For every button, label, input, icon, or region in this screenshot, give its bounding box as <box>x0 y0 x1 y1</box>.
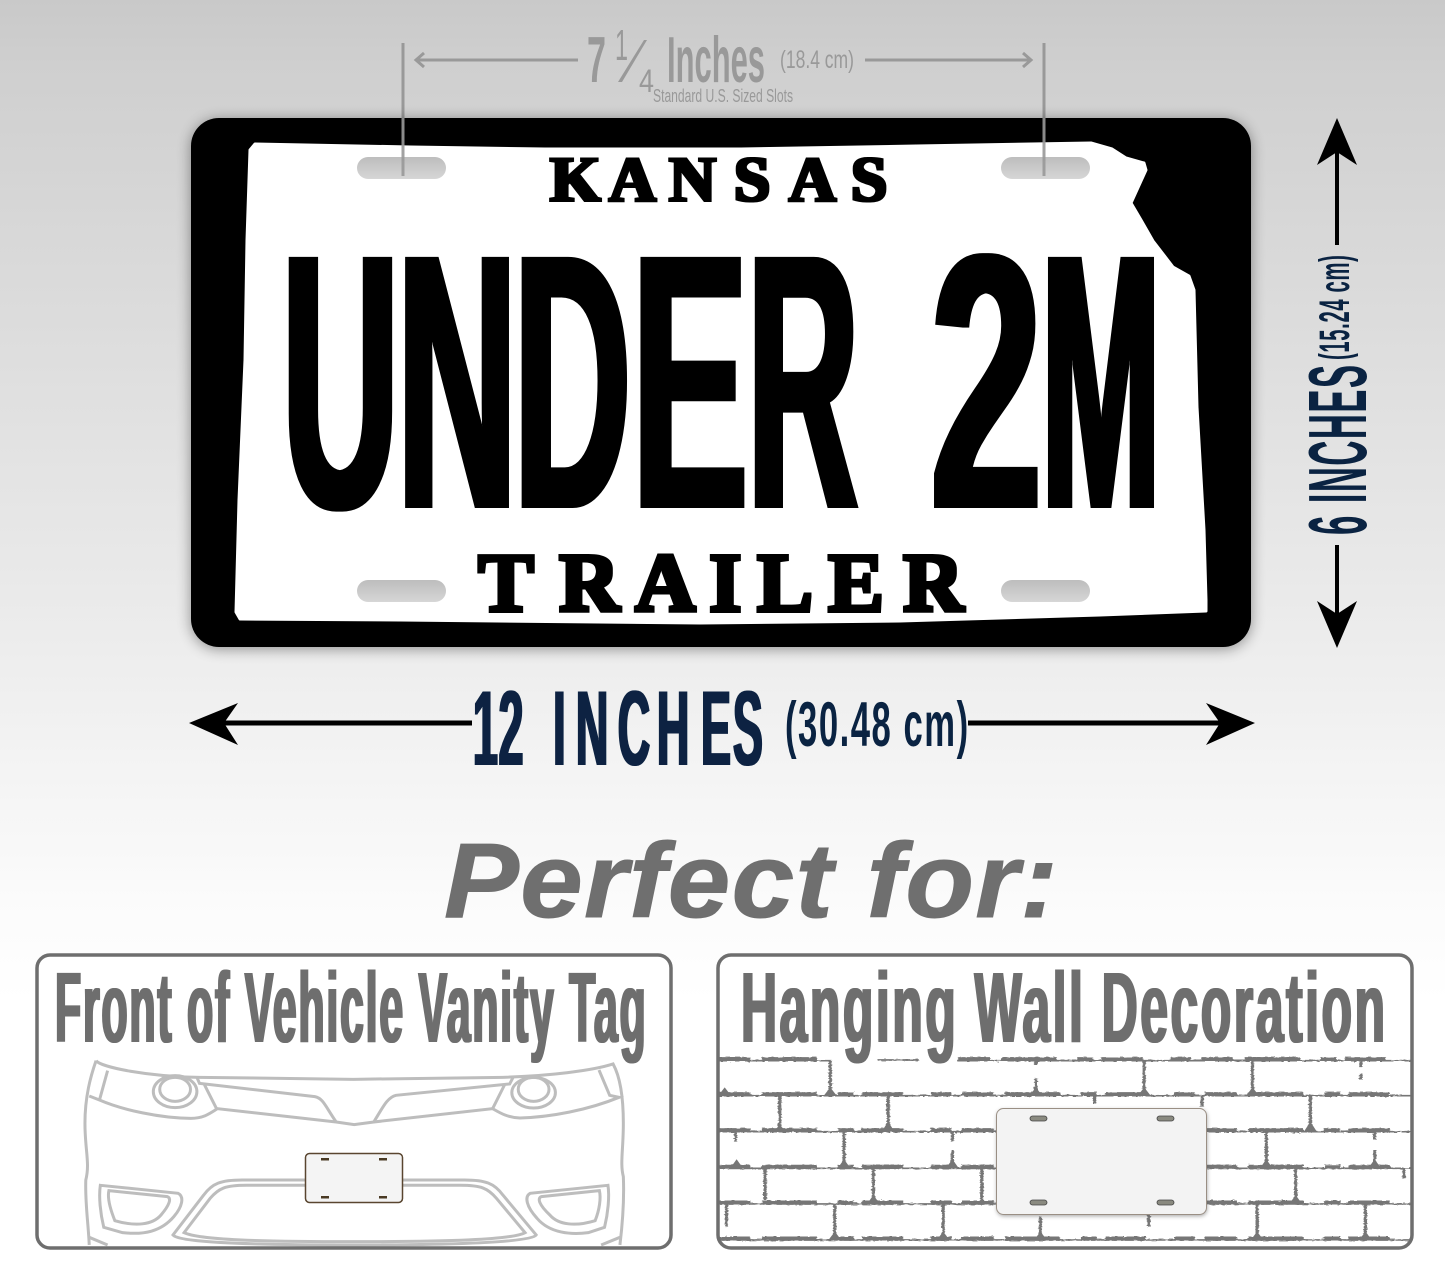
height dimension: 6 INCHES <box>1292 365 1384 535</box>
plate text: U <box>282 177 399 586</box>
plate text: N <box>397 179 517 586</box>
panel border <box>37 955 671 1248</box>
license plate <box>191 118 1251 649</box>
blank plate <box>996 1108 1207 1216</box>
mounting slots <box>357 157 1090 602</box>
state name: KANSAS <box>550 144 887 216</box>
slot spacing dimension <box>403 21 1044 176</box>
width dimension: 12 INCHES <box>473 670 763 788</box>
plate text: D <box>514 177 631 586</box>
slot spacing dimension: Standard U.S. Sized Slots <box>653 86 793 106</box>
slot spacing dimension: 7 <box>587 23 606 96</box>
width dimension <box>189 670 1255 788</box>
panel: hanging wall decoration <box>718 951 1412 1248</box>
heading: Perfect for: <box>444 822 1058 940</box>
panel: front of vehicle <box>37 952 671 1248</box>
plate text: M <box>1041 178 1161 586</box>
plate text <box>282 177 1161 586</box>
panel title: Hanging Wall Decoration <box>741 951 1385 1064</box>
slot spacing dimension: Inches <box>667 23 765 96</box>
panel border <box>718 955 1412 1248</box>
width dimension: (30.48 cm) <box>785 689 968 760</box>
brick wall <box>718 1059 1412 1240</box>
plate type: TRAILER <box>478 537 965 630</box>
panel title: Front of Vehicle Vanity Tag <box>55 952 646 1064</box>
small plate <box>306 1154 402 1202</box>
Kansas state outline <box>236 143 1206 623</box>
slot spacing dimension: 1 <box>615 21 628 70</box>
height dimension <box>1292 118 1384 648</box>
plate text: 2 <box>930 178 1043 586</box>
plate text: R <box>748 178 859 586</box>
slot spacing dimension: (18.4 cm) <box>780 46 854 74</box>
plate text: E <box>632 178 748 586</box>
slot spacing dimension: 4 <box>639 63 654 99</box>
height dimension: (15.24 cm) <box>1312 255 1359 360</box>
car line drawing <box>85 1061 624 1245</box>
